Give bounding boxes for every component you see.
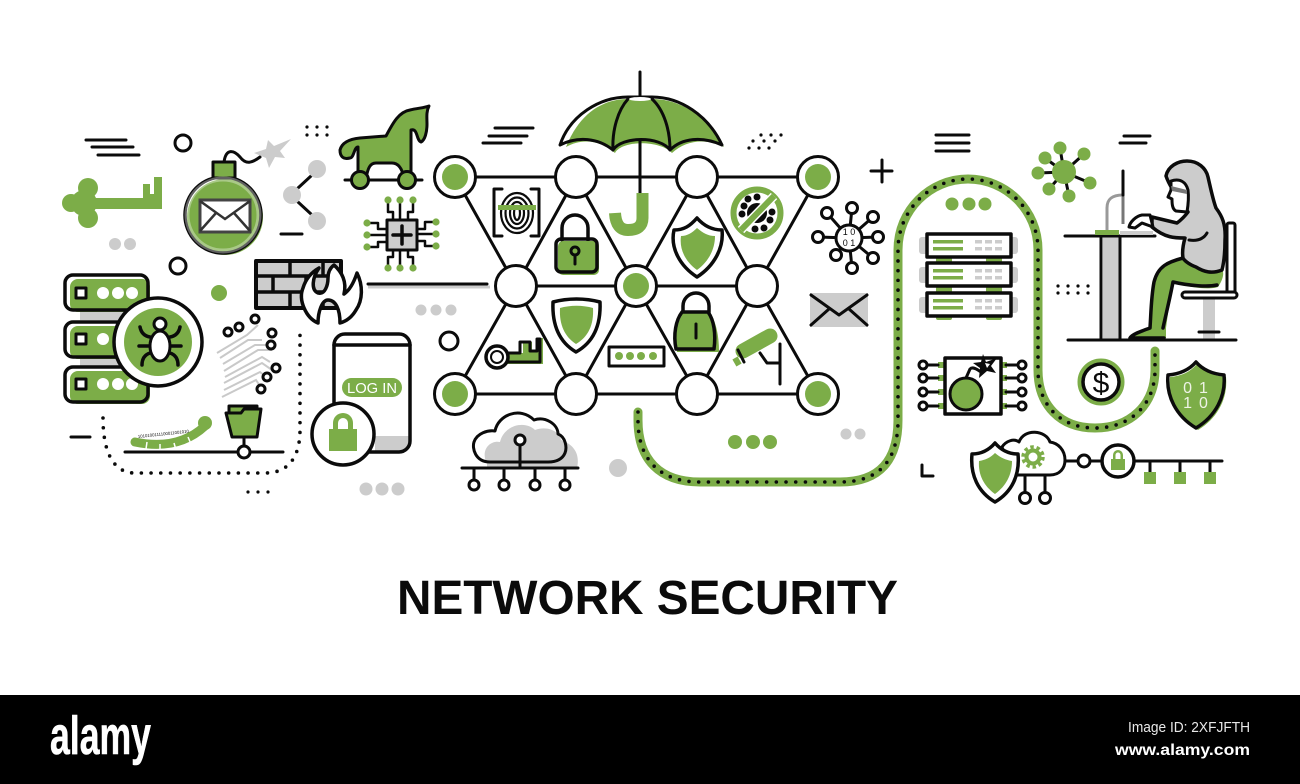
grey dots bbox=[416, 304, 456, 316]
hand bbox=[1129, 215, 1153, 228]
green dot bbox=[211, 285, 227, 301]
decorative lines above mesh bbox=[483, 128, 533, 143]
icon: chip with bomb bbox=[919, 354, 1026, 414]
watermark logo: alamy bbox=[50, 706, 151, 766]
icon: cloud network bbox=[462, 413, 578, 490]
icon: trojan horse bbox=[340, 106, 429, 188]
icon: bomb with envelope bbox=[185, 139, 291, 255]
illustration: hacker at desk bbox=[1065, 161, 1237, 340]
image id: Image ID: 2XFJFTH bbox=[1128, 719, 1250, 736]
small ring centre left bbox=[440, 332, 458, 350]
plus mark bbox=[871, 160, 892, 182]
icon: shield upper bbox=[673, 218, 722, 277]
lock badge bbox=[312, 403, 374, 465]
floor line bbox=[1068, 338, 1236, 342]
umbrella cap bbox=[629, 97, 651, 101]
monitor bbox=[1107, 171, 1123, 230]
spark bbox=[254, 139, 291, 168]
hoodie bbox=[1152, 161, 1225, 272]
dash bbox=[71, 436, 90, 438]
connector line bbox=[368, 284, 490, 287]
circuit traces bbox=[217, 315, 280, 397]
bug badge bbox=[114, 298, 202, 386]
icon: key outline bbox=[486, 338, 543, 368]
title: NETWORK SECURITY bbox=[397, 572, 898, 625]
login button: LOG IN bbox=[347, 380, 397, 397]
dot grid bbox=[1056, 284, 1090, 295]
decorative lines top left bbox=[86, 140, 139, 155]
small ring left bbox=[170, 258, 186, 274]
grey dots bbox=[840, 428, 866, 440]
icon: cloud with gear and shield bbox=[972, 432, 1222, 504]
chair bbox=[1182, 223, 1237, 339]
icon: rack servers bbox=[919, 234, 1018, 320]
lock node bbox=[1102, 445, 1222, 477]
icon: padlock bbox=[556, 215, 599, 275]
icon: binary shield: 10 bbox=[1183, 395, 1215, 412]
icon: security camera bbox=[735, 336, 780, 384]
icon: binary shield bbox=[1168, 362, 1226, 430]
icon: server stack with bug bbox=[65, 275, 202, 404]
icon: binary hub: 0 1 bbox=[843, 238, 855, 248]
gear bbox=[1023, 447, 1043, 467]
small ring bbox=[175, 135, 191, 151]
icon: virus forbidden bbox=[734, 190, 780, 236]
icon: password field bbox=[609, 347, 664, 366]
network line with folder bbox=[125, 406, 283, 458]
sleeve fold bbox=[1189, 233, 1207, 240]
winding green dotted path bbox=[638, 179, 1155, 482]
grey dot bbox=[609, 459, 627, 477]
icon: dollar coin: $ bbox=[1093, 367, 1110, 400]
dash bbox=[281, 232, 302, 236]
shield bbox=[972, 443, 1018, 502]
bracket mark bbox=[922, 465, 933, 476]
icon: umbrella bbox=[560, 72, 724, 230]
icon: green hub bbox=[1032, 142, 1096, 202]
green dots in arch bbox=[946, 198, 992, 210]
umbrella handle bbox=[615, 193, 642, 230]
website: www.alamy.com bbox=[1114, 742, 1250, 759]
icon: dollar coin bbox=[1080, 361, 1122, 403]
icon: grey envelope bbox=[810, 293, 868, 327]
icon: brick firewall with flame bbox=[256, 261, 361, 323]
grey dots bbox=[109, 238, 136, 250]
dot grid bbox=[305, 125, 329, 137]
icon: binary worm: 1010100111100011001010 bbox=[138, 429, 190, 439]
lines top far right bbox=[1120, 136, 1150, 143]
desk bbox=[1065, 230, 1155, 340]
icon: green key bbox=[62, 177, 162, 228]
scattered dots bbox=[747, 133, 783, 150]
icon: fingerprint bbox=[494, 189, 539, 236]
icon: phone login bbox=[312, 334, 410, 465]
icon: binary hub: 1 0 bbox=[843, 227, 855, 237]
envelope bbox=[200, 200, 250, 232]
grey dots under phone bbox=[360, 482, 404, 496]
face bbox=[1168, 180, 1188, 212]
icon: grey share network bbox=[283, 160, 326, 230]
dotted path left bbox=[103, 331, 300, 473]
folder icon bbox=[226, 406, 261, 437]
dots under dotted path bbox=[246, 490, 270, 494]
icon: binary shield: 01 bbox=[1183, 380, 1215, 397]
mesh network diagram bbox=[434, 156, 838, 414]
icon: binary worm bbox=[135, 416, 212, 451]
icon: shield lower bbox=[553, 299, 600, 352]
legs bbox=[1130, 258, 1223, 338]
green dots bbox=[728, 435, 777, 449]
icon: circuit chip bbox=[363, 196, 440, 272]
icon: binary hub bbox=[812, 202, 884, 274]
icon: round padlock bbox=[675, 293, 719, 352]
footer bar bbox=[0, 695, 1300, 784]
lines top right bbox=[936, 135, 969, 151]
